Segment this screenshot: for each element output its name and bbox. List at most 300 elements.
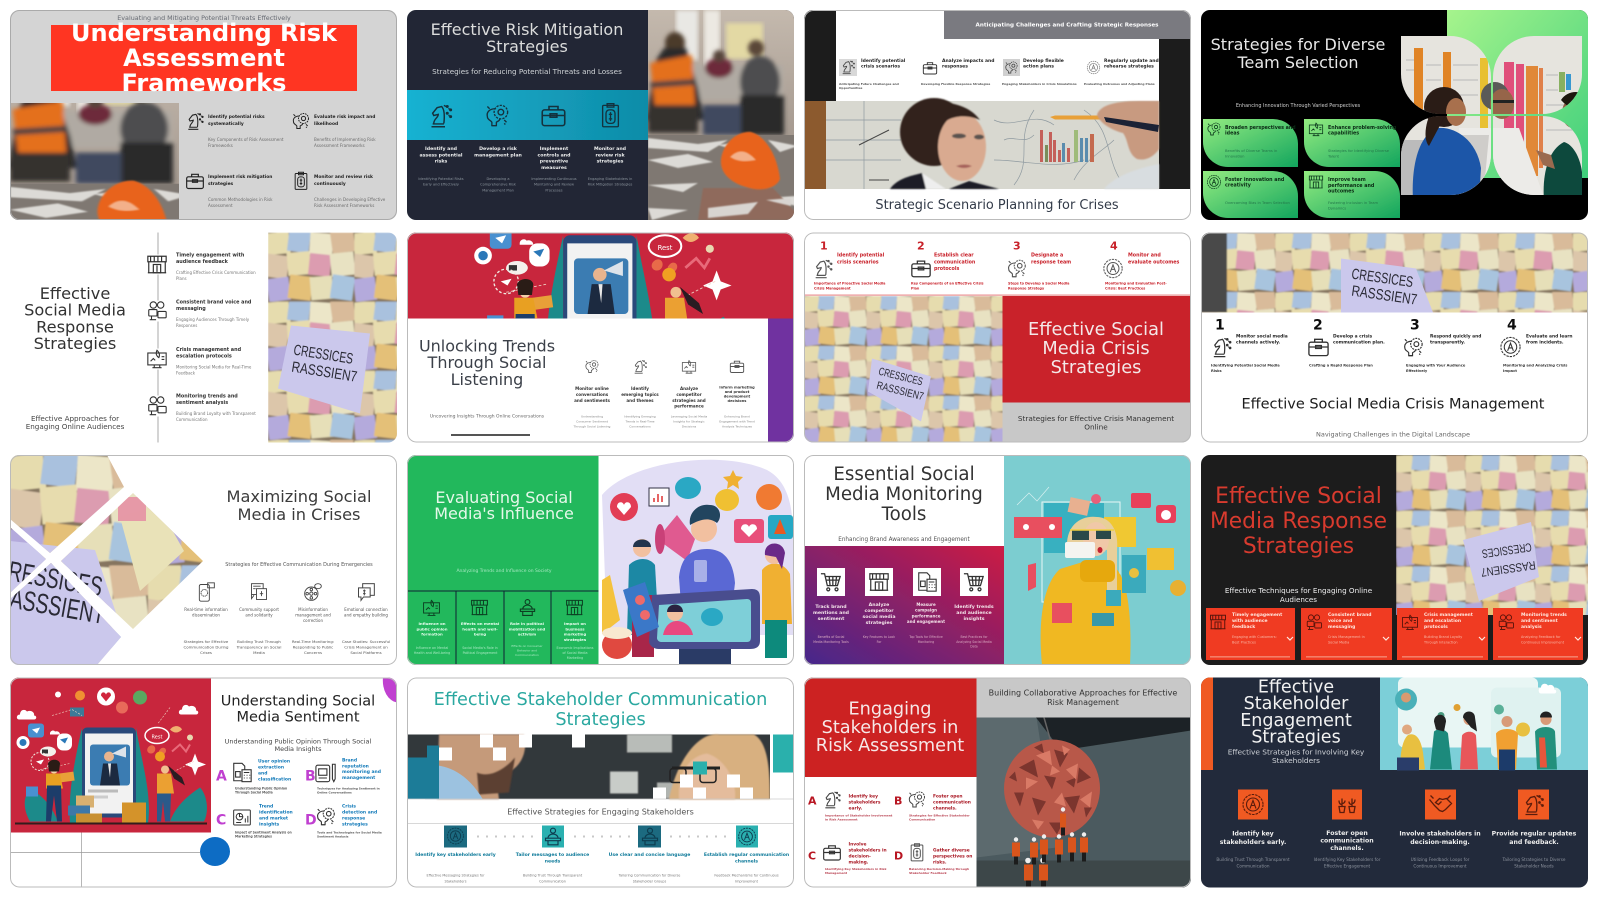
item: real-time information: dissemination	[192, 612, 220, 618]
icon: mandala	[1207, 175, 1221, 189]
icon: mandala	[1501, 337, 1520, 357]
item: business marketing: Economic Implications	[557, 646, 593, 650]
title: Strategies	[34, 334, 116, 353]
item: identify trends	[954, 568, 994, 649]
item: 4 evaluate: 4	[1507, 318, 1517, 334]
item: 4 monitor outcomes: Crisis: Best Practices	[1105, 286, 1145, 290]
item: 2 develop: communication plan.	[1333, 340, 1385, 346]
item: 1 identify scenarios: 1	[820, 240, 828, 252]
item: monitor and review: review risk	[595, 152, 625, 158]
item: implement controls	[531, 106, 577, 192]
item: real-time information: Communication During	[184, 644, 229, 650]
item: B brand reputation: Techniques for Analyzing Sentiment in	[317, 786, 380, 790]
item: foster innovation	[1203, 171, 1298, 218]
item: 3 designate team: Response Strategy	[1008, 286, 1045, 290]
title: Listening	[451, 370, 523, 389]
title: Strategies	[486, 37, 568, 56]
item: monitoring trends	[145, 394, 256, 422]
item: political mobilization	[509, 600, 545, 657]
item: improve performance: outcomes	[1328, 189, 1354, 195]
progress bar	[451, 434, 530, 436]
item: misinformation: management and	[295, 612, 331, 618]
item: identify scenarios: Anticipating Future Challenges and	[839, 82, 899, 86]
item: 2 establish protocols: Establish clear	[934, 254, 974, 258]
item: public opinion: public opinion	[416, 626, 448, 631]
item: identify stakeholders: Effective Messaging Strategies for	[426, 874, 485, 878]
item: monitor conversations: Monitor online	[575, 386, 609, 391]
panel: Engaging Stakeholders in Risk Assessment	[804, 678, 1191, 888]
illustration: social media	[10, 678, 211, 832]
item: D crisis detection: Crisis	[342, 804, 356, 810]
item: community support: Transparency on Social	[236, 644, 281, 650]
item: public opinion: Influence on	[418, 621, 446, 626]
item: 2 establish protocols: Key Components of an Effective Crisis	[911, 282, 984, 286]
item: 2 establish protocols: communication	[934, 259, 976, 265]
item: A identify stakeholders: Identify key	[848, 794, 878, 800]
item: inform marketing: Engagement with Trend	[719, 420, 755, 424]
photo: team at wall in petals	[1396, 30, 1586, 200]
item: real-time information: Strategies for Effective	[184, 639, 228, 644]
photo: safety meeting	[10, 103, 179, 220]
item: identify topics: emerging topics	[621, 392, 659, 397]
decorative blue circle	[200, 837, 230, 866]
item: B foster communication: B	[894, 794, 902, 808]
item: A user opinion: extraction	[258, 764, 284, 770]
item: 3 respond: transparently.	[1430, 340, 1465, 346]
item: develop plans: action plans	[1023, 64, 1054, 70]
item: 1 identify scenarios: crisis scenarios	[837, 259, 879, 265]
item: implement controls: Monitoring and Review	[534, 183, 574, 187]
grid lines	[10, 832, 200, 888]
item: crisis management: Feedback	[176, 370, 196, 376]
item: D gather perspectives: perspectives on	[933, 854, 972, 860]
item: A identify stakeholders: stakeholders	[848, 800, 881, 806]
item: timely engagement	[1206, 608, 1295, 660]
item: analyze competitor: social media	[862, 614, 896, 620]
item: monitoring trends: Monitoring trends	[1521, 613, 1567, 618]
item: foster innovation: Overcoming Bias in Team Selection	[1225, 201, 1291, 205]
title: Stakeholder	[1244, 694, 1349, 714]
item: evaluate impact: Evaluate risk impact and	[314, 115, 375, 120]
icon: chevron	[1383, 637, 1389, 640]
item: public opinion	[414, 600, 450, 655]
item: implement controls: controls and	[538, 152, 570, 158]
item: develop plan: Develop a risk	[479, 147, 517, 152]
icon: team	[149, 302, 166, 320]
title: Strategies	[1243, 534, 1354, 559]
item: crisis management: Crisis management and	[176, 347, 241, 353]
item: monitoring trends: Analyzing Feedback for	[1521, 635, 1560, 639]
item: foster communication: channels.	[1330, 845, 1364, 852]
item: business marketing: business	[565, 626, 585, 631]
item: B foster communication: Communication	[909, 818, 935, 822]
item: monitoring trends: and sentiment	[1521, 618, 1559, 624]
icon: chess knight	[188, 114, 203, 129]
item: analyze competitor: For	[877, 640, 882, 644]
item: D gather perspectives: Gather diverse	[933, 848, 970, 854]
title: Effective Social	[1215, 484, 1382, 509]
item: identify scenarios: Opportunities	[839, 86, 863, 90]
item: consistent voice: Crisis Management in	[1328, 635, 1365, 639]
title: Assessment	[123, 44, 285, 72]
item: monitor conversations: Consumer Sentiment	[576, 420, 609, 424]
item: analyze competitor: strategies	[866, 620, 893, 626]
item: enhance problem solving	[1304, 119, 1400, 167]
icon: film	[305, 584, 321, 600]
item: 1 identify scenarios: Identify potential	[837, 254, 884, 258]
title: Effective Stakeholder Communication	[434, 690, 767, 710]
item: crisis management: Through Interaction	[1423, 641, 1458, 645]
item: monitor conversations: Understanding	[581, 414, 603, 418]
item: regular updates: Tailoring Strategies to Diverse	[1502, 857, 1566, 862]
item: monitor conversations: Through Social Listening	[573, 424, 611, 428]
title: Effective Risk Mitigation	[431, 20, 623, 39]
item: identify stakeholders	[415, 826, 496, 883]
item: identify stakeholders: Stakeholders	[444, 879, 467, 883]
icon: mandala	[1104, 259, 1122, 278]
item: identify and assess: assess potential	[419, 152, 463, 158]
item: A user opinion: User opinion	[258, 760, 290, 764]
item: mental health: being	[474, 632, 486, 637]
item: political mobilization: mobilization and	[509, 626, 545, 631]
item: implement mitigation: Assessment	[208, 203, 233, 208]
item: analyze competitor: competitor	[864, 608, 894, 614]
item: 3 respond: 3	[1410, 318, 1420, 334]
item: misinformation: correction	[303, 618, 324, 623]
icon: team	[149, 397, 166, 415]
icon: mandala	[1087, 61, 1100, 74]
item: identify topics: Identifying Emerging	[624, 414, 656, 418]
item: A identify stakeholders	[808, 792, 893, 822]
item: public opinion: formation	[421, 632, 443, 637]
item: identify and assess: Identify and	[425, 147, 457, 152]
title: Media in Crises	[238, 505, 360, 524]
red title panel	[804, 678, 976, 777]
item: A identify stakeholders: early.	[848, 806, 863, 812]
subtitle: Building Collaborative Approaches for Effective	[989, 688, 1177, 698]
item: develop plans: Develop flexible	[1023, 59, 1064, 64]
subtitle: Enhancing Brand Awareness and Engagement	[838, 537, 971, 543]
icon: briefcase	[912, 261, 930, 277]
icon: chess knight	[825, 792, 840, 808]
item: D gather perspectives: D	[894, 850, 903, 862]
green title panel	[407, 455, 598, 665]
item: D gather perspectives: Stakeholder Feedback	[909, 871, 948, 875]
photo: sticky-note wall: RASSSIEN7	[875, 380, 925, 403]
item: implement controls: preventive	[540, 159, 568, 165]
illustration: megaphone crowd	[602, 460, 794, 665]
photo: safety meeting	[648, 10, 794, 220]
item: D gather perspectives: risks.	[933, 860, 947, 866]
subtitle: Enhancing Innovation Through Varied Perspectives	[1236, 103, 1361, 109]
item: D gather perspectives	[894, 844, 972, 875]
item: consistent voice: Consistent brand voice and	[176, 300, 251, 306]
item: emotional connection: Crisis Management on	[344, 644, 388, 650]
item: misinformation	[292, 584, 334, 655]
subtitle panel	[1002, 402, 1191, 442]
photo: sticky-note wall: CRESSICES	[1350, 266, 1414, 291]
item: identify topics	[621, 360, 659, 428]
icon: shop	[870, 574, 888, 590]
item: analyze impacts: responses	[942, 64, 968, 70]
item: identify trends: insights	[963, 616, 985, 622]
icon: chevron	[1479, 637, 1485, 640]
item: 4 monitor outcomes: evaluate outcomes	[1128, 259, 1180, 265]
item: analyze competitors: Leveraging Social Media	[671, 414, 707, 418]
item: emotional connection	[342, 584, 390, 655]
title: Strategies	[1251, 728, 1341, 748]
item: C involve stakeholders: C	[808, 850, 816, 862]
item: C trend identification: and market	[259, 816, 289, 822]
item: 1 monitor: 1	[1215, 318, 1225, 334]
icon: cart	[964, 574, 983, 591]
item: identify trends: Analyzing Social Media	[956, 640, 992, 644]
title: Understanding Risk	[71, 19, 337, 47]
item: analyze competitor: Key Features to Look	[863, 635, 895, 639]
item: timely engagement: with audience	[1232, 618, 1268, 624]
item: inform marketing: development	[724, 394, 751, 398]
title: Effective Social	[1028, 319, 1164, 340]
item: foster communication: Foster open	[1326, 830, 1368, 837]
item: real-time information	[184, 583, 229, 655]
item: crisis management: escalation protocols	[176, 354, 232, 360]
icon: briefcase	[923, 63, 937, 74]
item: update and rehearse: Evaluating Outcomes and Adjusting Plans	[1084, 82, 1155, 86]
photo: sticky-note wall: RASSSIEN7	[290, 359, 358, 386]
item: 2 develop: Crafting a Rapid Response Plan	[1309, 364, 1373, 368]
subtitle: Understanding Public Opinion Through Social	[225, 738, 371, 746]
item: develop plan: Developing a	[486, 177, 510, 181]
item: consistent voice	[145, 300, 252, 328]
item: 4 evaluate	[1501, 318, 1573, 373]
item: analyze competitors: Decisions	[682, 424, 697, 428]
photo: sticky-note wall: CRESSICES	[877, 366, 924, 388]
item: analyze competitors	[671, 360, 707, 428]
title: Strategic Scenario Planning for Crises	[875, 198, 1119, 213]
item: D crisis detection: detection and	[342, 810, 377, 816]
item: improve performance: Dynamics	[1328, 206, 1346, 210]
item: D gather perspectives: Balancing Decision-Making through	[909, 867, 969, 871]
item: analyze competitors: Analyze	[680, 386, 698, 391]
item: track mentions: Media Monitoring Tools	[813, 640, 849, 644]
item: monitor conversations: and sentiments	[574, 398, 610, 403]
title: Frameworks	[122, 69, 286, 97]
item: monitoring trends: Building Brand Loyalty with Transparent	[176, 411, 256, 416]
item: analyze competitors: competitor	[676, 392, 702, 397]
photo: stakeholders at a board	[407, 734, 794, 800]
item: enhance problem solving: Enhance problem-solving	[1328, 126, 1396, 131]
item: 4 evaluate: Impact	[1503, 369, 1517, 373]
item: C trend identification: C	[216, 812, 226, 828]
item: regular channels	[704, 826, 789, 883]
item: analyze competitors: Insights for Strategic	[673, 420, 705, 424]
item: measure campaign: Monitoring	[918, 640, 934, 644]
item: track mentions: Benefits of Social	[818, 635, 844, 639]
photo: sticky-note wall	[804, 296, 1012, 452]
photo: sticky-note wall: RASSSIEN7	[1350, 283, 1418, 309]
item: monitor and review: continuously	[314, 181, 346, 187]
item: regular channels: Establish regular communication	[704, 853, 789, 858]
item: D crisis detection	[305, 804, 382, 838]
item: misinformation: Misinformation	[298, 607, 328, 612]
item: foster communication	[1314, 790, 1381, 868]
item: 2 establish protocols	[911, 240, 984, 290]
item: 3 respond: Engaging with Your Audience	[1406, 364, 1465, 368]
title: Evaluating Social	[435, 488, 573, 507]
panel: Understanding Risk Assessment Frameworks	[10, 10, 397, 220]
item: D crisis detection: strategies	[342, 822, 368, 828]
icon: briefcase	[730, 361, 744, 372]
icon: gear bulb	[293, 114, 308, 128]
item: 1 monitor: Identifying Potential Social Media	[1211, 364, 1280, 368]
item: business marketing: Marketing	[567, 656, 583, 660]
item: B brand reputation: management	[342, 775, 376, 781]
red title banner	[51, 25, 357, 91]
icon: documents	[919, 573, 936, 591]
icon: gear tile	[1003, 59, 1020, 76]
item: identify stakeholders: stakeholders early.	[1220, 839, 1286, 846]
item: measure campaign: performance	[912, 613, 941, 618]
item: timely engagement: feedback	[1232, 624, 1256, 630]
item: identify stakeholders	[1216, 790, 1290, 868]
item: B brand reputation: monitoring and	[342, 769, 381, 775]
item: implement controls: Implement	[540, 147, 568, 152]
item: foster communication: communication	[1320, 838, 1374, 844]
item: implement mitigation: Implement risk mitigation	[208, 175, 272, 180]
item: 3 designate team: response team	[1031, 259, 1071, 265]
icon: handshake	[1430, 796, 1452, 812]
item: D crisis detection: Sentiment Analysis	[317, 834, 349, 838]
panel: Understanding Social Media Sentiment	[0, 668, 397, 888]
item: analyze impacts: Developing Flexible Response Strategies	[921, 82, 991, 86]
item: 3 respond: Effectively	[1406, 369, 1428, 373]
header banner	[944, 10, 1191, 39]
photo: sticky-note wall in diamond tiles	[0, 455, 217, 674]
icon: shop	[148, 256, 166, 273]
title: Media Monitoring	[825, 484, 983, 505]
item: C involve stakeholders: Management	[825, 871, 848, 875]
item: inform marketing: Inform marketing	[719, 386, 755, 390]
panel: Maximizing Social Media in Crises	[0, 455, 397, 674]
title: Strategies	[555, 710, 646, 730]
title: Effective	[40, 284, 110, 303]
item: involve stakeholders: decision-making.	[1410, 839, 1470, 846]
item: B foster communication	[894, 792, 971, 822]
photo: sticky-note wall	[1396, 455, 1593, 617]
item: involve stakeholders: Utilizing Feedback Loops for	[1411, 857, 1469, 862]
icon: clipboard	[603, 104, 618, 127]
subtitle: Risk Management	[1047, 698, 1119, 707]
title: Maximizing Social	[227, 487, 371, 506]
icon: chevron	[1287, 637, 1293, 640]
item: 3 respond	[1405, 318, 1481, 373]
title: Media Sentiment	[236, 710, 360, 726]
icon: shop	[567, 600, 582, 615]
item: broaden perspectives: ideas	[1225, 131, 1240, 137]
photo: sticky-note wall: RASSSIEN7	[1480, 558, 1537, 580]
panel: Strategic Scenario Planning for Crises	[804, 10, 1191, 220]
green backdrop	[1447, 10, 1588, 178]
item: C trend identification: Impact of Sentiment Analysis on	[235, 830, 292, 834]
item: identify stakeholders: Building Trust Through Transparent	[1216, 857, 1290, 862]
item: consistent voice: messaging	[1328, 624, 1355, 630]
icon: gear bulb	[1009, 260, 1025, 277]
item: regular channels: Improvement	[735, 879, 759, 883]
item: C trend identification: identification	[259, 810, 293, 816]
item: consistent voice: Consistent brand	[1328, 613, 1372, 618]
item: A user opinion: classification	[258, 776, 291, 782]
icon: book	[316, 764, 335, 782]
item: identify risks: Key Components of Risk Assessment	[208, 137, 284, 142]
subtitle: Effective Strategies for Engaging Stakeholders	[507, 808, 694, 816]
item: identify trends: Data	[970, 645, 978, 649]
subtitle: Effective Techniques for Engaging Online	[1225, 586, 1372, 595]
item: improve performance: Fostering Inclusion in Team	[1328, 201, 1378, 205]
item: business marketing: of Social Media	[563, 651, 587, 655]
item: B brand reputation: reputation	[342, 763, 369, 769]
item: A user opinion: Through Social Media	[235, 790, 273, 794]
icon: mandala	[1243, 794, 1263, 814]
item: consistent voice: voice and	[1328, 618, 1352, 624]
item: measure campaign: and engagement	[907, 619, 945, 624]
item: emotional connection: and empathy building	[344, 612, 388, 618]
item: 1 identify scenarios	[814, 240, 886, 290]
item: analyze competitor: Analyze	[869, 603, 889, 608]
item: implement controls: Processes	[545, 188, 563, 192]
item: consistent voice: Engaging Audiences Through Timely	[176, 317, 249, 322]
item: consistent voice	[1301, 608, 1392, 660]
item: community support: Building Trust Through	[237, 639, 281, 644]
item: monitoring trends: Continuous Improvement	[1521, 641, 1565, 645]
title: Unlocking Trends	[419, 336, 555, 356]
item: B foster communication: Strategies for Effective Stakeholder	[909, 814, 970, 818]
icon: briefcase	[824, 846, 840, 860]
photo: sticky-note wall in diamond tiles: RESSICES	[6, 555, 105, 602]
item: 1 monitor	[1211, 318, 1288, 373]
item: identify risks: Frameworks	[208, 143, 233, 148]
illustration: woman in yellow	[1004, 455, 1191, 665]
item: involve stakeholders	[1399, 790, 1481, 868]
item: measure campaign: Top Tools for Effective	[909, 635, 943, 639]
item: C involve stakeholders: Identifying Key Stakeholders in Risk	[825, 867, 886, 871]
item: tailor messages: Building Trust Through Transparent	[523, 874, 582, 878]
item: B foster communication: Foster open	[933, 794, 962, 800]
item: identify risks: systematically	[208, 121, 244, 127]
item: consistent voice: Responses	[176, 323, 197, 328]
item: identify stakeholders: Identify key stakeholders early	[415, 852, 496, 858]
item: timely engagement: Crafting Effective Crisis Communication	[176, 270, 256, 275]
icon: gear bulb	[318, 808, 334, 825]
item: identify topics: Trends in Real-Time	[624, 420, 655, 424]
item: monitor and review	[295, 172, 386, 208]
item: track mentions: sentiment	[818, 616, 845, 622]
item: crisis management	[1397, 608, 1488, 660]
item: update and rehearse	[1084, 58, 1159, 86]
item: business marketing: strategies	[564, 637, 587, 642]
item: identify and assess: risks	[435, 159, 448, 165]
item: mental health: health and well-	[462, 626, 498, 631]
item: A user opinion: and	[258, 770, 267, 776]
item: 1 monitor: Monitor social media	[1236, 334, 1288, 340]
subtitle: Stakeholders	[1272, 756, 1320, 765]
item: monitor and review: Engaging Stakeholders in	[588, 177, 632, 181]
subtitle: Audiences	[1280, 595, 1317, 604]
item: identify and assess: Identifying Potential Risks	[418, 177, 464, 181]
item: community support: and solidarity	[245, 612, 273, 618]
icon: monitor	[148, 350, 166, 368]
item: broaden perspectives	[1203, 119, 1298, 167]
item: 1 monitor: channels actively.	[1236, 340, 1281, 346]
